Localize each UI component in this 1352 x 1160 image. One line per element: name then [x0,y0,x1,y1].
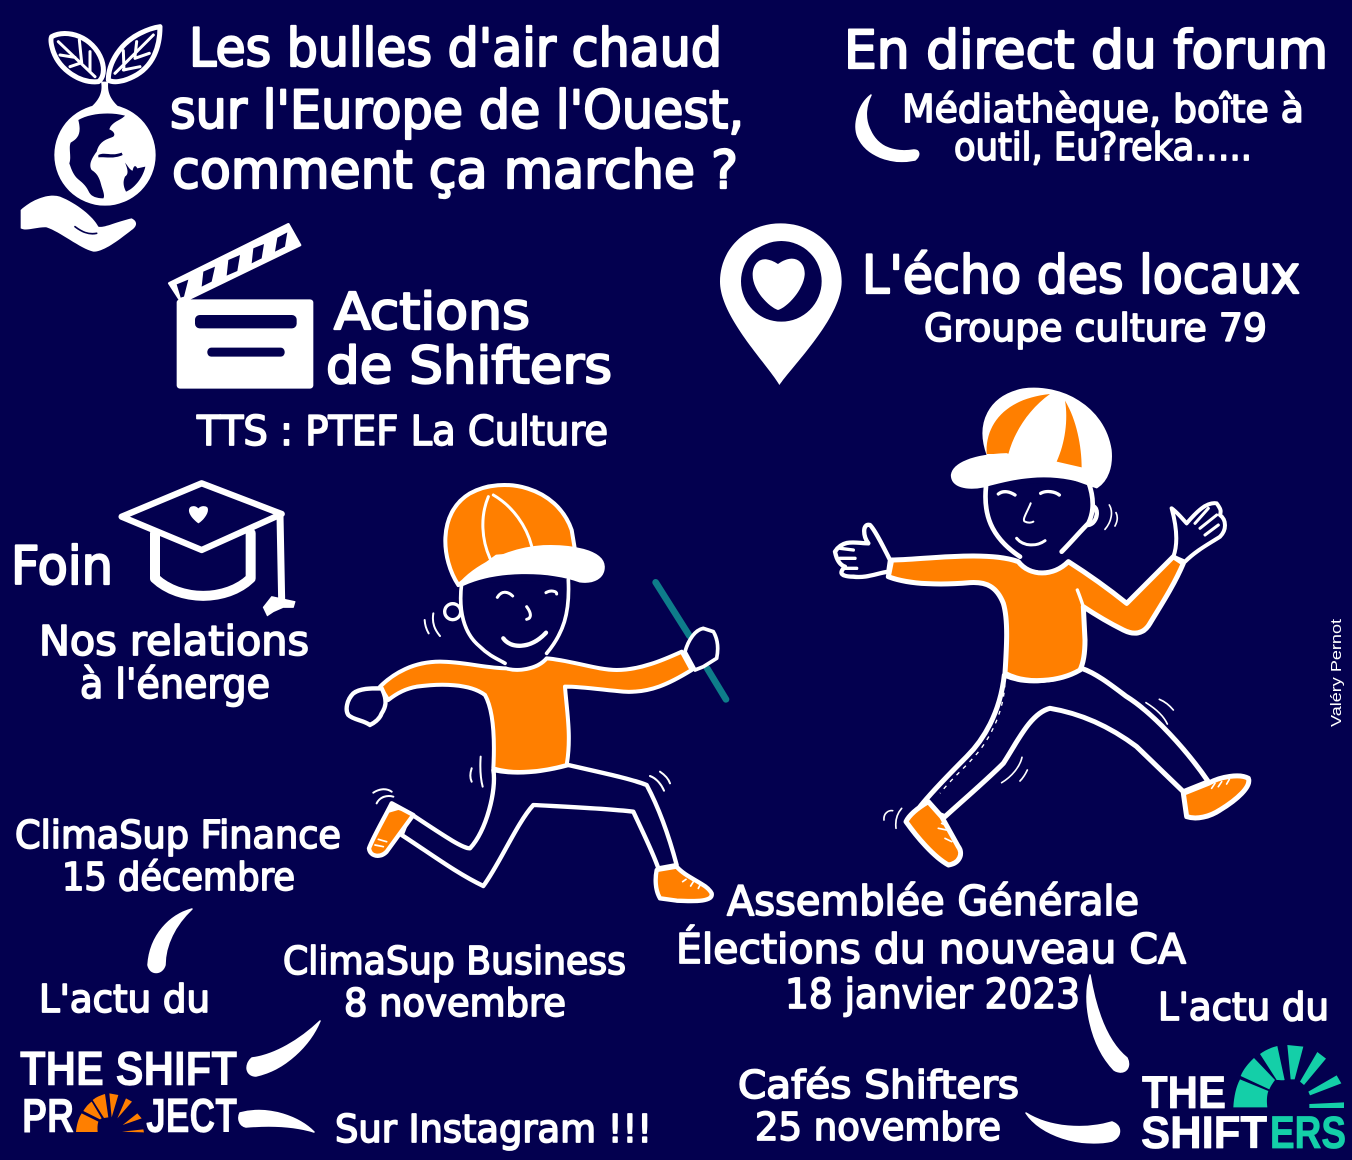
motion lines [884,505,1173,828]
logo: the shift project: THE SHIFT [20,1043,237,1096]
title: les bulles d'air chaud: Les bulles d'air chaud [189,18,722,79]
cap [984,389,1110,487]
torso and arms [380,652,692,772]
arrow: project to instagram swoosh [239,1111,314,1132]
head [445,604,461,620]
logo: the shifters: THE [1142,1067,1226,1118]
heading: actions de shifters [326,283,612,396]
hands [835,525,890,577]
text: l'actu du (left): L'actu du [39,977,210,1021]
logo: the shifters: SHIFT [1141,1107,1267,1158]
text: assemblée générale: 18 janvier 2023 [785,970,1080,1018]
logo: the shift project [20,1043,237,1143]
text: cafés shifters: 25 novembre [755,1105,1001,1149]
arrow: forum swoosh [856,95,919,161]
text: nos relations à l'énergie: à l'énerge [80,660,270,708]
text: cafés shifters: Cafés Shifters [738,1063,1019,1107]
heading: foin: Foin [11,536,113,597]
logo: the shift project: JECT [146,1090,237,1143]
legs [402,765,677,886]
text: climasup business: ClimaSup Business [283,939,626,983]
text block: médiathèque [902,87,1304,169]
heading: actions de shifters: Actions [334,283,530,342]
icon: graduation cap [122,483,295,616]
logo: the shift project: PR [22,1090,74,1143]
text block: médiathèque: outil, Eu?reka….. [954,125,1252,169]
face [998,492,1059,495]
icon: clapperboard [169,224,313,389]
icon: map pin with heart [720,223,842,385]
text: sur instagram: Sur Instagram !!! [335,1107,652,1151]
title: les bulles d'air chaud: sur l'Europe de l'Ouest, [170,80,744,141]
fists [347,688,386,725]
heading: actions de shifters: de Shifters [326,337,612,396]
title: les bulles d'air chaud [170,18,744,201]
text: cafés shifters [738,1063,1019,1149]
credit: valéry pernot: Valéry Pernot [1328,618,1345,727]
text: assemblée générale: Assemblée Générale [727,877,1139,925]
text: nos relations à l'énergie [39,617,309,708]
arrow: assemblée swoosh [1087,975,1129,1072]
icon: green sun [1233,1045,1344,1108]
motion lines [373,613,670,803]
text: climasup finance: 15 décembre [62,855,295,899]
title: les bulles d'air chaud: comment ça marche ? [172,140,738,201]
text: climasup finance [15,813,341,899]
text: tts ptef: TTS : PTEF La Culture [196,407,608,455]
icon: orange sun [76,1093,144,1132]
arrow: business swoosh [247,1021,320,1076]
text block: médiathèque: Médiathèque, boîte à [902,87,1304,131]
illustration: running figure with baton [347,485,726,901]
heading: en direct du forum: En direct du forum [844,20,1328,81]
text: assemblée générale [676,877,1186,1018]
text: climasup business [283,939,626,1025]
text: groupe culture 79: Groupe culture 79 [924,306,1267,350]
text: climasup finance: ClimaSup Finance [15,813,341,857]
baton [656,582,726,699]
head [1088,506,1097,525]
arrow: cafés swoosh [1026,1113,1120,1143]
text: climasup business: 8 novembre [344,981,566,1025]
text: assemblée générale: Élections du nouveau CA [676,925,1186,973]
face [497,591,557,619]
shoes [906,802,961,865]
heading: l'écho des locaux: L'écho des locaux [862,245,1300,306]
shoes [369,803,413,856]
arrow: finance swoosh [148,909,192,972]
torso and arms [888,556,1183,681]
text: l'actu du (right): L'actu du [1158,985,1329,1029]
illustration: waving running figure [835,389,1249,865]
text: nos relations à l'énergie: Nos relations [39,617,309,665]
logo: the shifters [1141,1045,1346,1158]
legs [920,668,1208,817]
cap [445,485,575,585]
icon: plant globe in hand [21,27,160,252]
